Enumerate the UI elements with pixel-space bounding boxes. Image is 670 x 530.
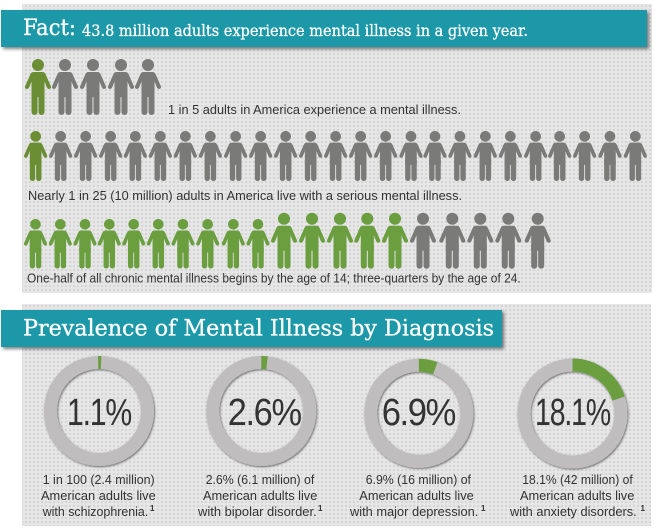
caption: bipolar disorder: with bipolar disorder. [197, 505, 317, 519]
donut: major depression: 6.9% [382, 392, 456, 434]
caption: bipolar disorder: American adults live [203, 489, 317, 503]
pictogram row: 1 in 25 adults [24, 131, 647, 181]
donut: anxiety disorders: 18.1% [535, 392, 611, 434]
caption: schizophrenia: 1 [150, 504, 155, 513]
panel: fact background [22, 4, 652, 293]
panel: prevalence background [22, 304, 651, 526]
text: age of onset: One-half of all chronic mental illness begins by the age of 14; three-quarters by the age of 24. [27, 272, 521, 286]
donut: major depression [371, 365, 467, 461]
caption: major depression [349, 473, 486, 519]
caption: bipolar disorder: 2.6% (6.1 million) of [206, 473, 315, 487]
caption: schizophrenia [41, 473, 156, 519]
caption: anxiety disorders [509, 473, 646, 519]
caption: major depression: 6.9% (16 million) of [366, 473, 472, 487]
heading banner: fact: Fact: [23, 16, 76, 41]
donut: bipolar disorder: 2.6% [228, 392, 301, 434]
heading banner: prevalence [1, 310, 502, 347]
pictogram row: 1 in 5 adults [25, 59, 161, 115]
text: 1 in 5 adults: 1 in 5 adults in America experience a mental illness. [168, 103, 461, 117]
donut: bipolar disorder [213, 362, 310, 460]
donut: schizophrenia: 1.1% [67, 392, 132, 434]
caption: schizophrenia: with schizophrenia. [42, 505, 148, 519]
caption: anxiety disorders: with anxiety disorders. [509, 505, 637, 519]
caption: anxiety disorders: American adults live [520, 489, 634, 503]
caption: schizophrenia: American adults live [41, 489, 156, 503]
donut: schizophrenia [50, 362, 148, 460]
caption: major depression: 1 [481, 504, 486, 513]
heading banner: fact: 43.8 million adults experience mental illness in a given year. [82, 22, 528, 40]
caption: bipolar disorder [197, 473, 323, 519]
heading banner: prevalence: Prevalence of Mental Illness by Diagnosis [23, 317, 494, 342]
caption: anxiety disorders: 18.1% (42 million) of [522, 473, 633, 487]
heading banner: fact [1, 10, 647, 47]
caption: major depression: American adults live [359, 489, 474, 503]
caption: anxiety disorders: 1 [640, 504, 646, 513]
caption: major depression: with major depression. [349, 505, 478, 519]
caption: bipolar disorder: 1 [318, 504, 323, 513]
text: 1 in 25 adults: Nearly 1 in 25 (10 million) adults in America live with a serious mental illness. [28, 189, 462, 203]
donut: anxiety disorders [524, 365, 621, 462]
caption: schizophrenia: 1 in 100 (2.4 million) [43, 473, 155, 487]
pictogram row: age of onset [24, 213, 551, 269]
